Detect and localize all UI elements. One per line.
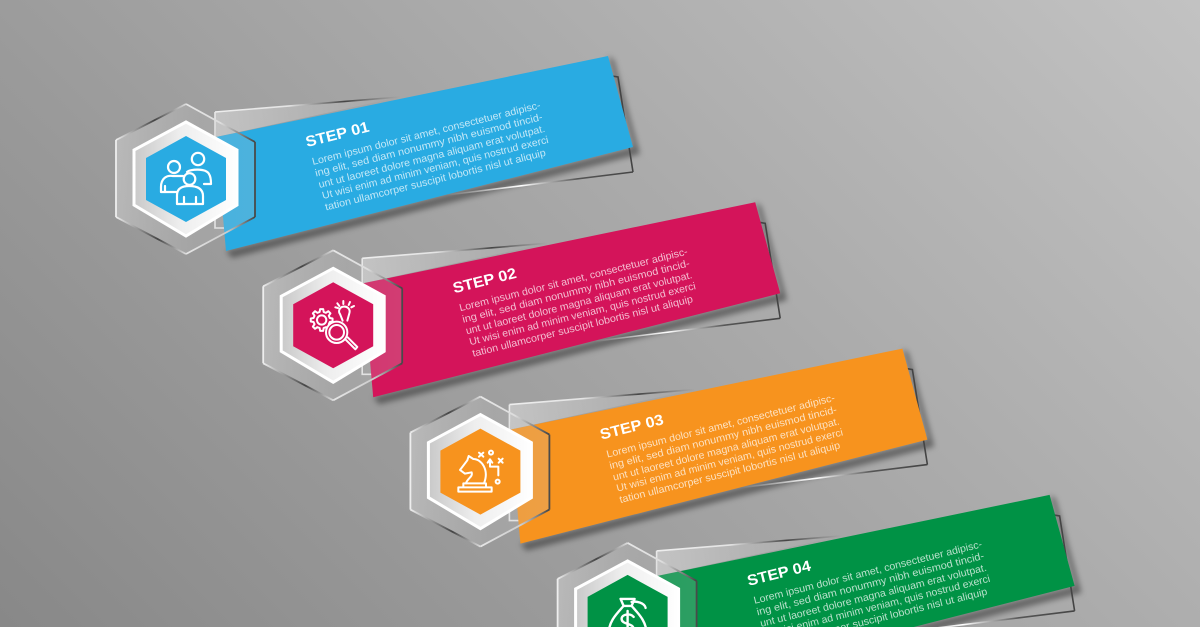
body text: unt ut laoreet dolore magna aliquam erat volutpat. bbox=[318, 124, 546, 191]
ribbon shadow bbox=[226, 56, 640, 258]
body text: ing elit, sed diam nonummy nibh euismod tincid- bbox=[608, 405, 838, 472]
ribbon bbox=[658, 495, 1075, 627]
body text bbox=[311, 100, 550, 213]
body text: unt ut laoreet dolore magna aliquam erat volutpat. bbox=[465, 270, 694, 337]
step heading: STEP 03 bbox=[598, 411, 665, 443]
step heading: STEP 01 bbox=[304, 119, 371, 151]
glass frame bbox=[362, 222, 780, 374]
ribbon shadow bbox=[373, 202, 787, 404]
step 1 bbox=[116, 56, 640, 258]
step 2 bbox=[263, 202, 787, 404]
icon: gear, magnifier and light bulb bbox=[311, 301, 357, 349]
glass frame bbox=[215, 76, 633, 228]
icon: chess knight and strategy arrows bbox=[458, 451, 503, 492]
body text bbox=[753, 539, 991, 627]
body text: ing elit, sed diam nonummy nibh euismod tincid- bbox=[756, 551, 985, 618]
body text bbox=[605, 393, 844, 506]
icon: money bag bbox=[609, 599, 647, 627]
body text: Ut wisi enim ad minim veniam, quis nostrud exerci bbox=[615, 427, 844, 495]
body text bbox=[458, 247, 697, 360]
hexagon badge bbox=[116, 104, 255, 254]
body text: Ut wisi enim ad minim veniam, quis nostrud exerci bbox=[468, 281, 697, 348]
body text: tation ullamcorper suscipit lobortis nisl ut aliquip bbox=[471, 294, 695, 360]
ribbon bbox=[510, 349, 927, 544]
glass frame bbox=[657, 515, 1075, 627]
step heading: STEP 02 bbox=[451, 265, 518, 297]
body text: Lorem ipsum dolor sit amet, consectetuer adipisc- bbox=[311, 100, 542, 168]
ribbon shadow bbox=[520, 349, 934, 551]
hexagon badge bbox=[410, 397, 549, 547]
step 4 bbox=[558, 495, 1082, 627]
ribbon bbox=[216, 56, 633, 251]
hexagon badge bbox=[263, 250, 402, 400]
glass frame bbox=[509, 369, 927, 521]
body text: ing elit, sed diam nonummy nibh euismod tincid- bbox=[314, 112, 544, 179]
ribbon bbox=[363, 202, 780, 397]
body text: Lorem ipsum dolor sit amet, consectetuer adipisc- bbox=[458, 247, 689, 314]
icon: people bbox=[161, 153, 211, 204]
step 3 bbox=[410, 349, 934, 551]
ribbon shadow bbox=[668, 495, 1082, 627]
step heading: STEP 04 bbox=[745, 557, 813, 590]
body text: tation ullamcorper suscipit lobortis nisl ut aliquip bbox=[618, 440, 842, 506]
body text: tation ullamcorper suscipit lobortis nisl ut aliquip bbox=[324, 148, 547, 213]
body text: Ut wisi enim ad minim veniam, quis nostrud exerci bbox=[321, 135, 550, 202]
body text: Lorem ipsum dolor sit amet, consectetuer adipisc- bbox=[753, 539, 983, 607]
body text: Lorem ipsum dolor sit amet, consectetuer adipisc- bbox=[605, 393, 836, 461]
body text: unt ut laoreet dolore magna aliquam erat volutpat. bbox=[612, 416, 841, 484]
hexagon badge bbox=[558, 543, 697, 627]
body text: ing elit, sed diam nonummy nibh euismod tincid- bbox=[461, 258, 691, 326]
